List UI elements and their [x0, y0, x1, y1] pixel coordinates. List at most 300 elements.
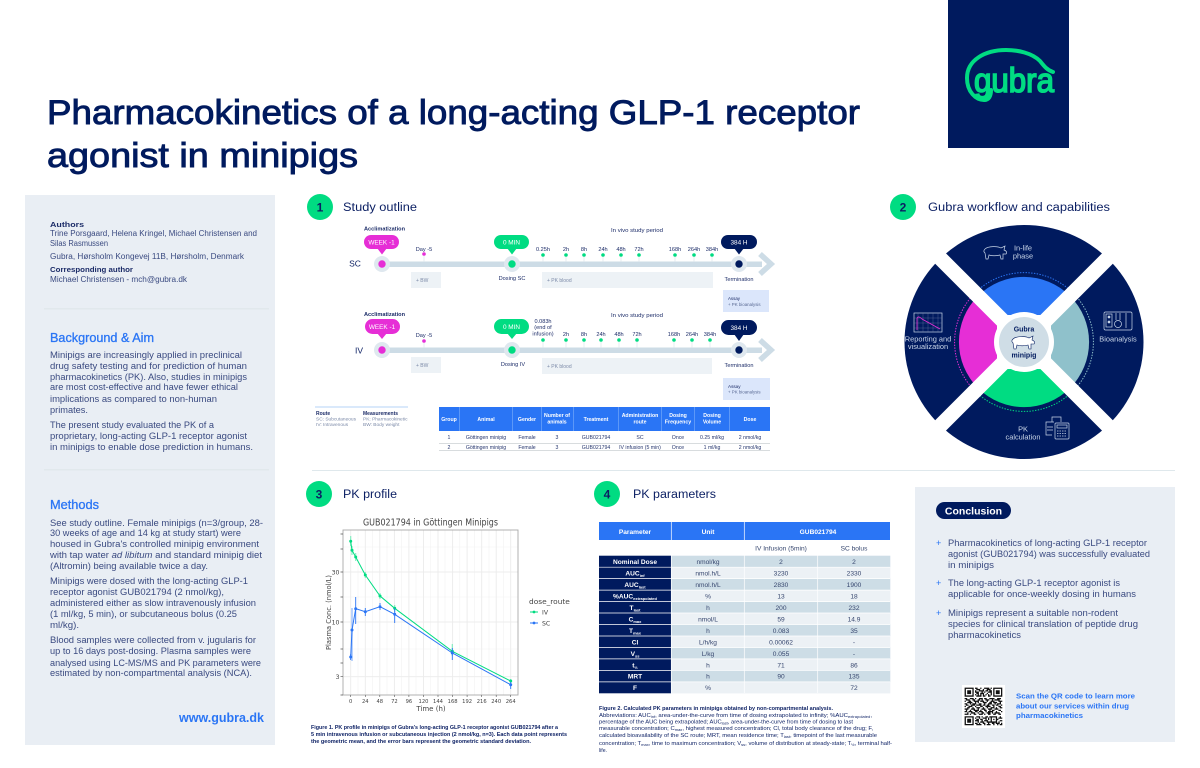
caption: figure 2 [599, 706, 892, 754]
row backgrounds [599, 555, 890, 693]
table: study design: Group [441, 417, 457, 423]
sampling time points: infusion) [532, 332, 554, 338]
x axis ticks and labels: 144 [433, 699, 444, 705]
row values: 35 [850, 628, 858, 635]
x axis ticks and labels: 96 [406, 699, 412, 705]
table: study design: Volume [703, 420, 721, 426]
caption: figure 2: percentage of the AUC being extrapolated; AUC [599, 720, 718, 726]
x axis ticks and labels: 48 [376, 699, 383, 705]
wheel segment: reporting [959, 296, 1024, 388]
title: Pharmacokinetics of a long-acting GLP-1 receptor [47, 94, 860, 132]
row values: 0.083 [773, 628, 790, 635]
authors block: Authors [50, 220, 84, 229]
text: background: primates. [50, 405, 88, 415]
text: methods: ml/kg). [50, 620, 79, 630]
table: study design: Once [672, 445, 684, 451]
box: BW: + BW [416, 278, 429, 284]
table: study design: 0.25 ml/kg [700, 435, 724, 441]
row labels: F [633, 685, 637, 692]
y axis ticks and labels: 10 [332, 620, 340, 626]
row labels: AUC [624, 582, 639, 589]
row values: 0.00062 [769, 639, 793, 646]
row labels: T [630, 605, 634, 612]
row labels: t [632, 662, 634, 669]
section 2 heading: workflow: Gubra workflow and capabilities [928, 202, 1110, 214]
chart: plasma concentration over time [325, 518, 570, 713]
text: background: Minipigs are increasingly applied in preclinical [50, 350, 242, 360]
row values: 232 [848, 605, 860, 612]
marker: termination: 384 H [730, 325, 748, 332]
label: bioanalysis: Bioanalysis [1099, 334, 1137, 344]
row values: 2830 [774, 582, 789, 589]
section 3 heading: PK profile: PK profile [343, 489, 397, 501]
row values: 2330 [847, 570, 862, 578]
row values: 3230 [774, 570, 789, 578]
text: methods: See study outline. Female minipigs (n=3/group, 28- [50, 518, 263, 528]
conclusion list: + [936, 608, 941, 618]
conclusion list: pharmacokinetics [948, 630, 1022, 640]
row values: 2 [779, 559, 783, 566]
caption: figure 1: the geometric mean, and the error bars represent the geometric standard deviation. [311, 739, 531, 745]
table: study design: Treatment [584, 417, 609, 423]
conclusion list: + [936, 578, 941, 588]
table: study design: 3 [556, 435, 559, 441]
row labels: C [629, 616, 633, 623]
heading: background and aim: Background & Aim [50, 331, 154, 345]
table: PK parameters: Parameter [619, 529, 652, 536]
conclusion list [936, 538, 1150, 640]
marker: dosing IV: Dosing IV [501, 362, 525, 368]
box: BW: + BW [416, 363, 429, 369]
sampling time points: (end of [534, 325, 552, 331]
text: methods: estimated by non-compartmental analysis (NCA). [50, 668, 252, 678]
table: PK parameters: GUB021794 [800, 529, 837, 536]
x axis ticks and labels: 120 [419, 699, 428, 705]
text: methods: analysed using LC-MS/MS and PK parameters were [50, 658, 261, 668]
label: in-life phase: In-life [1014, 244, 1032, 252]
x axis ticks and labels [349, 695, 516, 705]
row values: % [705, 685, 711, 692]
table: study design: 2 nmol/kg [739, 435, 761, 441]
table: PK parameters: SC bolus [841, 546, 868, 552]
legend: route and measurements: IV: Intravenous [316, 422, 349, 428]
website link: www.gubra.dk [178, 710, 265, 725]
arrow [760, 340, 771, 360]
text: methods [49, 518, 263, 678]
box: PK blood: + PK blood [547, 364, 572, 370]
table: study design: Female [518, 445, 536, 451]
row labels: max [633, 619, 642, 624]
x axis ticks and labels: 192 [462, 699, 472, 705]
table: study design: Dosing [703, 413, 721, 419]
caption: figure 2: extrapolated [848, 715, 870, 719]
QR call to action: about our services within drug [1016, 702, 1129, 710]
table: study design: 1 [448, 435, 451, 441]
marker: termination: 384 H [730, 239, 748, 246]
row values: 1900 [847, 582, 862, 589]
text: methods: up to 16 days post-dosing. Plasma samples were [50, 646, 251, 656]
row labels [613, 559, 658, 692]
caption: figure 2: , volume of distribution at steady-state; T [745, 741, 852, 747]
section 2 heading: workflow [890, 194, 1110, 220]
row values: nmol/L [698, 616, 718, 623]
table: study design: Once [672, 435, 684, 441]
timeline: IV route: IV [355, 346, 363, 356]
row values: h [706, 605, 710, 612]
timeline: IV route [355, 312, 771, 400]
box: assay: Assay [728, 384, 741, 389]
title [47, 94, 860, 175]
row values: 90 [777, 674, 785, 681]
heading pill: conclusion [936, 502, 1011, 519]
row values: - [853, 651, 855, 658]
marker: day -5: Day -5 [416, 247, 432, 253]
table: study design: 3 [556, 445, 559, 451]
marker: dosing SC: Dosing SC [499, 276, 525, 282]
box: BW [411, 272, 441, 288]
box: PK blood: + PK blood [547, 278, 572, 284]
section 3 heading: PK profile [306, 481, 397, 507]
caption: figure 2: , area-under-the-curve from time of dosing to last [728, 720, 853, 726]
x axis title: Time (h) [415, 705, 446, 713]
box: assay [723, 378, 770, 400]
conclusion list: The long-acting GLP-1 receptor agonist is [948, 578, 1121, 588]
sampling time points: 2h [563, 247, 569, 253]
marker: week -1 [365, 319, 400, 358]
authors block: Gubra, Hørsholm Kongevej 11B, Hørsholm, Denmark [50, 252, 245, 261]
row values: nmol.h/L [695, 570, 721, 578]
row values: 0.055 [773, 651, 790, 658]
text: background: The present study evaluated the PK of a [50, 420, 214, 430]
section 4 heading: PK parameters [594, 481, 716, 507]
legend: route and measurements: Measurements [363, 411, 398, 417]
marker: termination [721, 320, 757, 369]
box: BW [411, 357, 441, 373]
QR code [962, 685, 1005, 728]
caption: figure 2: measurable concentration; C [599, 726, 671, 732]
row labels: extrapolated [633, 596, 658, 601]
label: PK calculation [1006, 424, 1040, 442]
table: study design: route [634, 420, 647, 426]
y axis ticks and labels: 30 [332, 570, 340, 576]
row values: 14.9 [848, 616, 861, 623]
icon: report chart [914, 313, 942, 332]
text: methods: (1 ml/kg, 5 min), or subcutaneous bolus (0.25 [50, 609, 237, 619]
y axis ticks and labels [332, 534, 343, 695]
text: background: proprietary, long-acting GLP-1 receptor agonist [50, 431, 248, 441]
sampling time points: 0.25h [536, 247, 550, 253]
panel: authors, background and methods [25, 195, 275, 745]
caption: figure 2: , timepoint of the last measurable [790, 733, 877, 739]
chart legend: dose_route [529, 597, 570, 606]
caption: figure 2: concentration; T [599, 741, 639, 747]
table: study design: Administration [622, 413, 658, 419]
wheel centre: Gubra minipig: minipig [1012, 352, 1036, 360]
caption: figure 1 [311, 725, 567, 745]
row values: h [706, 674, 710, 681]
box: assay: + PK bioanalysis [728, 302, 761, 307]
table: study design: GUB021794 [582, 445, 610, 451]
legend: route and measurements: BW: Body weight [363, 422, 400, 428]
text: background: pharmacokinetics (PK). Also, studies in minipigs [50, 372, 247, 382]
authors block: Trine Porsgaard, Helena Kringel, Michael Christensen and [50, 229, 257, 238]
title: agonist in minipigs [47, 137, 358, 175]
y axis title: Plasma Conc. (nmol/L) [325, 575, 333, 650]
text: background: are most cost-effective and have fewer ethical [50, 382, 238, 392]
authors block [50, 220, 257, 284]
timeline: SC route [349, 226, 771, 312]
timeline: IV route: Acclimatization [364, 312, 406, 318]
table: PK parameters: IV Infusion (5min) [755, 546, 807, 552]
row values: nmol/kg [696, 559, 720, 566]
box: assay: Assay [728, 296, 741, 301]
caption: figure 2: , [870, 713, 872, 719]
x axis ticks and labels: 240 [491, 699, 501, 705]
row values [695, 559, 862, 692]
marker: dosing SC [494, 235, 529, 282]
caption: figure 2: calculated bioavailability of the SC route; MRT, mean residence time; T [599, 733, 774, 739]
table: study design: 2 [448, 445, 451, 451]
table: study design: Göttingen minipig [466, 435, 506, 441]
x axis ticks and labels: 0 [349, 699, 352, 705]
caption: figure 2: , time to maximum concentration; V [649, 741, 741, 747]
row values: L/kg [702, 651, 715, 658]
sampling time points: 48h [616, 247, 626, 253]
legend: route and measurements: SC: Subcutaneous [316, 416, 357, 422]
row values: 71 [777, 662, 785, 669]
text: methods: administered either as slow intravenously infusion [50, 598, 256, 608]
wheel segment: in-life [978, 277, 1070, 342]
wheel centre: Gubra minipig: Gubra [1014, 326, 1034, 334]
conclusion list: agonist (GUB021794) was successfully evaluated [948, 549, 1150, 559]
box: PK blood [542, 358, 712, 374]
table: study design: Dose [744, 417, 756, 423]
label: PK calculation: PK [1018, 424, 1028, 434]
table: study design: 2 nmol/kg [739, 445, 761, 451]
legend: route and measurements [315, 407, 408, 428]
sampling time points: 264h [686, 332, 698, 338]
marker: week -1: WEEK -1 [369, 324, 396, 331]
legend: route and measurements: Route [316, 411, 330, 417]
caption: figure 2: ½ [851, 743, 855, 747]
section 4 heading: PK parameters: 4 [604, 488, 611, 502]
row values: 72 [850, 685, 858, 692]
logo: gubra [948, 0, 1069, 148]
conclusion list: + [936, 538, 941, 548]
text: methods: Minipigs were dosed with the long-acting GLP-1 [50, 576, 248, 586]
marker: termination [721, 235, 757, 283]
sampling time points: 24h [598, 247, 608, 253]
row labels: max [633, 630, 642, 635]
caption: figure 2: last [784, 735, 791, 739]
timeline: SC route: Acclimatization [364, 226, 406, 232]
caption: figure 2: , area-under-the-curve from time of dosing extrapolated to infinity; %AUC [655, 713, 848, 719]
sampling time points: 48h [614, 332, 624, 338]
caption: figure 2: , terminal half- [855, 741, 892, 747]
heading: methods: Methods [50, 498, 99, 512]
row values: 59 [777, 616, 785, 623]
marker: dosing IV: 0 MIN [503, 324, 520, 331]
series: IV [349, 536, 512, 684]
text: background: in minipigs to enable dose prediction in humans. [50, 442, 253, 452]
y axis ticks and labels: 3 [336, 674, 340, 681]
row labels: ½ [634, 665, 638, 670]
chart title: GUB021794 in Göttingen Minipigs [363, 518, 498, 528]
caption: figure 2: life. [599, 748, 607, 754]
authors block: Michael Christensen - mch@gubra.dk [50, 275, 188, 284]
caption: figure 1: 5 min intravenous infusion or subcutaneous injection (2 nmol/kg, n=3). Each data point represents [311, 732, 567, 738]
QR call to action: Scan the QR code to learn more [1016, 692, 1135, 700]
timeline: SC route: In vivo study period [611, 228, 663, 234]
heading pill: conclusion: Conclusion [945, 506, 1002, 518]
text: methods: Blood samples were collected from v. jugularis for [50, 635, 256, 645]
text: background: implications as compared to non-human [50, 394, 217, 404]
authors block: Corresponding author [50, 265, 133, 274]
caption: figure 2: max [675, 728, 682, 732]
x axis ticks and labels: 216 [477, 699, 487, 705]
text: methods: 30 weeks of age and 14 kg at study start) were [50, 528, 241, 538]
table: study design: animals [547, 420, 567, 426]
box: assay [723, 290, 769, 312]
panel: conclusion [915, 487, 1175, 742]
row labels: MRT [628, 674, 642, 681]
section 1 heading: study outline: Study outline [343, 202, 417, 214]
wheel diagram: workflow [904, 225, 1144, 459]
marker: termination: Termination [725, 277, 753, 283]
marker: day -5 [416, 247, 432, 262]
conclusion list: species for clinical translation of peptide drug [948, 619, 1138, 629]
conclusion list: Minipigs represent a suitable non-rodent [948, 608, 1119, 618]
sampling time points: 24h [596, 332, 606, 338]
caption: figure 2: last [722, 722, 729, 726]
table: study design [439, 407, 770, 451]
row labels: ss [635, 653, 640, 658]
chart legend [529, 597, 570, 628]
table: study design: Gender [518, 417, 536, 423]
section 1 heading: study outline [307, 194, 417, 220]
row values: - [853, 639, 855, 646]
sampling time points: 0.083h [534, 319, 552, 325]
table: study design: GUB021794 [582, 435, 610, 441]
sampling time points: 264h [688, 247, 700, 253]
row labels: last [634, 608, 641, 612]
label: in-life phase: phase [1013, 252, 1033, 260]
icon: calculator and document [1046, 417, 1069, 439]
row labels: Cl [632, 639, 638, 646]
sampling time points [536, 247, 718, 262]
sampling time points: 72h [632, 332, 642, 338]
row values: h [706, 628, 710, 635]
conclusion list: Pharmacokinetics of long-acting GLP-1 receptor [948, 538, 1147, 548]
icon: bioanalysis instrument [1104, 312, 1132, 330]
sampling time points: 384h [704, 332, 716, 338]
table: study design: Female [518, 435, 536, 441]
caption: figure 1: Figure 1. PK profile in minipigs of Gubra's long-acting GLP-1 receptor agonist GUB021794 after a [311, 725, 559, 731]
label: in-life phase [1013, 244, 1033, 260]
QR call to action [1016, 692, 1135, 720]
label: reporting and visualization: visualization [908, 342, 948, 351]
row values: nmol.h/L [695, 582, 721, 589]
marker: week -1 [364, 235, 399, 272]
logo: gubra: gubra [974, 62, 1054, 100]
timeline: IV route: In vivo study period [611, 313, 663, 319]
wheel segment: PK calculation [978, 342, 1070, 407]
marker: day -5: Day -5 [416, 333, 432, 339]
sampling time points: 168h [668, 332, 680, 338]
marker: week -1: WEEK -1 [368, 239, 395, 246]
row labels: AUC [625, 570, 640, 578]
marker: dosing IV [494, 319, 529, 368]
row values: 200 [775, 605, 787, 612]
conclusion list: in minipigs [948, 560, 995, 570]
wheel segment: bioanalysis [1024, 296, 1089, 388]
row values: % [705, 594, 711, 600]
conclusion list: applicable for once-weekly dosing in humans [948, 589, 1137, 599]
section 4 heading: PK parameters: PK parameters [633, 489, 716, 501]
row labels: Nominal Dose [613, 559, 657, 566]
caption: figure 2: inf [651, 715, 656, 719]
timeline: SC route: SC [349, 258, 361, 268]
row values: 135 [848, 674, 860, 681]
caption: figure 2: ss [741, 743, 745, 747]
label: PK calculation: calculation [1006, 432, 1040, 442]
text: methods: with tap water ad libitum and standard minipig diet [49, 550, 263, 560]
sampling time points: 168h [669, 247, 681, 253]
table: PK parameters [599, 522, 890, 693]
series: SC [349, 597, 512, 689]
label: reporting and visualization: Reporting and [905, 334, 951, 344]
row labels: last [639, 584, 646, 590]
row values: 13 [777, 594, 785, 600]
text: background: drug safety testing and for prediction of human [50, 361, 247, 371]
authors block: Silas Rasmussen [50, 239, 108, 248]
box: assay: + PK bioanalysis [728, 390, 761, 394]
sampling time points: 2h [563, 332, 569, 338]
row labels: inf [640, 573, 645, 578]
table: study design: Göttingen minipig [466, 445, 506, 451]
arrow [760, 254, 771, 274]
x axis ticks and labels: 24 [362, 699, 369, 705]
x axis ticks and labels: 72 [391, 699, 398, 705]
row values: h [706, 662, 710, 669]
table: study design: Frequency [665, 420, 691, 426]
sampling time points: 72h [634, 247, 644, 253]
row labels: %AUC [613, 594, 633, 600]
table: study design: Number of [544, 413, 570, 419]
row values: 18 [850, 594, 858, 600]
row values: 86 [850, 662, 858, 669]
label: reporting and visualization [905, 334, 951, 351]
x axis ticks and labels: 264 [506, 699, 516, 705]
text: background [50, 350, 253, 452]
box: PK blood [542, 272, 713, 288]
chart legend: IV [542, 610, 549, 616]
table: study design: Dosing [669, 413, 687, 419]
table: study design: Animal [477, 417, 495, 423]
row labels: T [629, 628, 633, 635]
wheel centre: Gubra minipig [1012, 326, 1036, 360]
sampling time points: 384h [706, 247, 718, 253]
section 2 heading: workflow: 2 [900, 200, 907, 214]
sampling time points [532, 319, 716, 348]
section 1 heading: study outline: 1 [317, 200, 324, 214]
QR call to action: pharmacokinetics [1016, 711, 1083, 720]
caption: figure 2: max [641, 743, 649, 747]
table: study design: SC [636, 435, 644, 441]
text: methods: housed in Gubra's controlled minipig environment [50, 539, 260, 549]
caption: figure 2: Abbreviations: AUC [599, 713, 648, 719]
table: PK parameters: Unit [702, 529, 715, 536]
